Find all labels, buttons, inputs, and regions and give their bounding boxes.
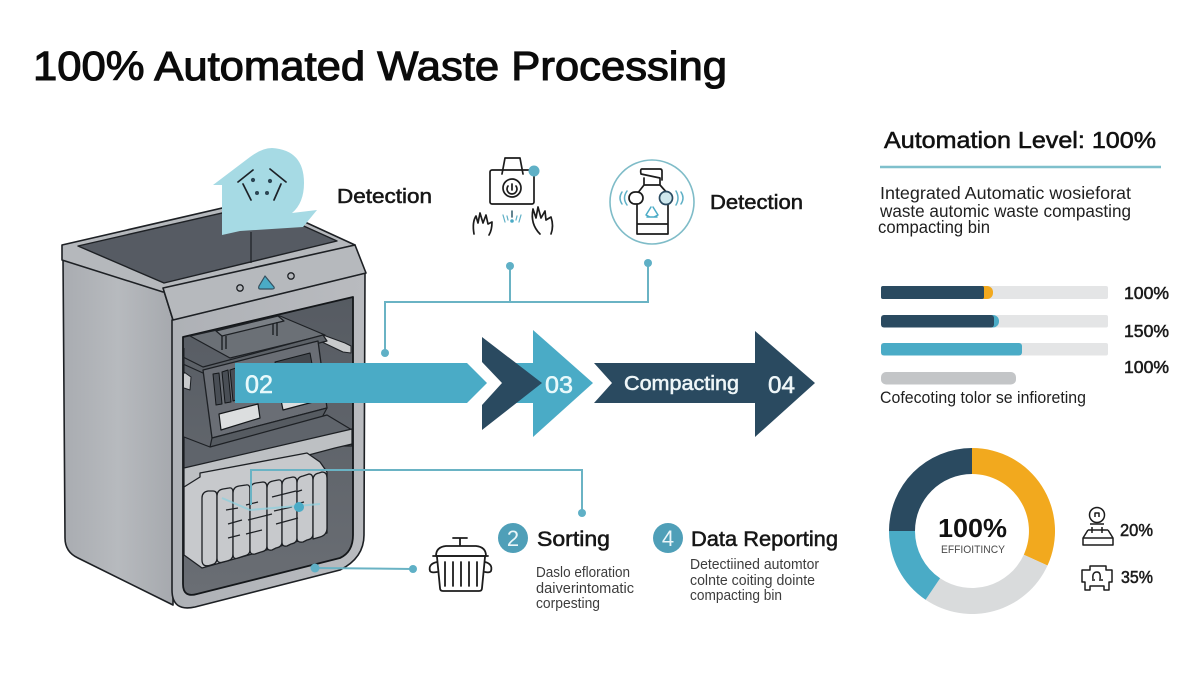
title: 100% Automated Waste Processing: [33, 43, 727, 89]
text: sorting description: Daslo efloration: [536, 565, 630, 581]
shelf band: [184, 429, 352, 488]
stat: 20%: 20%: [1120, 520, 1153, 540]
illustration: waste compacting bin: [62, 200, 366, 608]
heading: sorting: Sorting: [537, 527, 610, 551]
heading: automation level: Automation Level: 100%: [884, 127, 1156, 153]
lower compartment compacting bin: [184, 453, 327, 568]
divider: [880, 166, 1161, 168]
arrow: step 02: 02: [245, 371, 273, 399]
upper compartment machine: [183, 316, 351, 447]
icon: bag with power button and hands: [473, 158, 552, 235]
arrow: step 02: [235, 363, 487, 403]
text: data reporting description: [690, 557, 819, 604]
heading: detection left: Detection: [337, 185, 432, 208]
inner opening: [183, 297, 353, 595]
bar chart: 100%: [1124, 357, 1169, 377]
heading: detection right: Detection: [710, 191, 803, 214]
arrow: step 03: 03: [545, 372, 573, 399]
donut chart: [889, 448, 1055, 614]
text: automation description: compacting bin: [878, 217, 990, 237]
heading: data reporting: Data Reporting: [691, 527, 838, 551]
text: automation description: [878, 183, 1131, 237]
text: sorting description: daiverintomatic: [536, 581, 634, 597]
connector: sorting link: [222, 470, 586, 517]
shelf: [184, 415, 352, 470]
text: automation description: Integrated Automatic wosieforat: [880, 183, 1131, 203]
text: data reporting description: colnte coiting dointe: [690, 573, 815, 589]
donut chart: EFFIOITINCY: [941, 544, 1006, 556]
cabinet side panel: [63, 258, 173, 605]
badge: step 4: 4: [662, 526, 674, 551]
arrow: compacting step 04: Compacting: [624, 373, 739, 395]
bar chart: 100%: [1124, 283, 1169, 303]
text: sorting description: corpesting: [536, 596, 600, 612]
icon: puzzle stat: [1082, 566, 1112, 590]
connector: pot link: [310, 564, 417, 573]
icon: detection speech bubble: [213, 148, 317, 235]
arrow: compacting step 04: [594, 331, 815, 437]
text: data reporting description: compacting bin: [690, 588, 782, 604]
icon: register stat: [1083, 508, 1113, 545]
arrow: compacting step 04: 04: [768, 372, 795, 399]
connector: detection links: [381, 259, 652, 357]
control strip: [163, 245, 366, 320]
icon: lidded bin: [430, 538, 491, 591]
bar chart: Cofecoting tolor se infioreting: [880, 389, 1086, 407]
icon: recycling bottle sensor in circle: [610, 160, 694, 244]
bar chart: [880, 283, 1169, 407]
cabinet front frame: [172, 273, 365, 608]
badge: step 4: [653, 523, 683, 553]
text: automation description: waste automic waste compasting: [879, 201, 1131, 221]
stat: 35%: 35%: [1121, 567, 1153, 587]
bar chart: 150%: [1124, 321, 1169, 341]
arrow: step 03: [482, 330, 593, 437]
badge: step 2: [498, 523, 528, 553]
text: data reporting description: Detectiined automtor: [690, 557, 819, 573]
text: sorting description: [536, 565, 634, 612]
donut chart: 100%: [938, 513, 1007, 543]
badge: step 2: 2: [507, 526, 519, 551]
cabinet lid: [62, 200, 355, 292]
